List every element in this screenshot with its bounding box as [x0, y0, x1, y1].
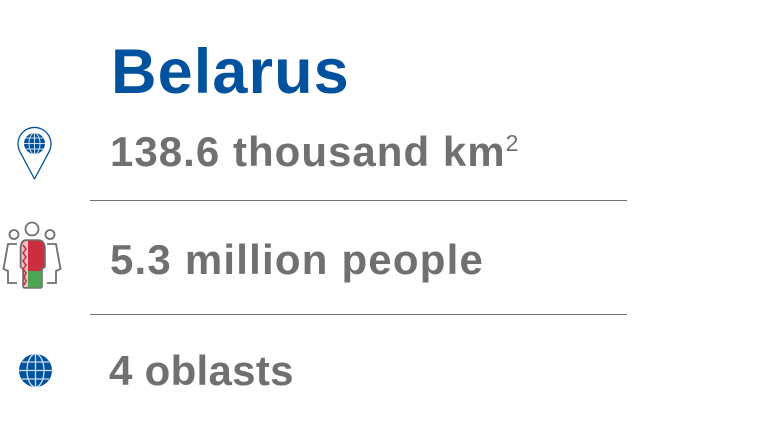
title: Belarus	[111, 37, 350, 107]
icon: globe	[19, 354, 52, 388]
icon: people with Belarus flag	[2, 222, 62, 289]
oblasts text: 4 oblasts	[109, 347, 294, 394]
population text: 5.3 million people	[110, 236, 484, 283]
icon: location pin with globe	[17, 126, 52, 180]
area text: 138.6 thousand km2	[110, 128, 518, 175]
